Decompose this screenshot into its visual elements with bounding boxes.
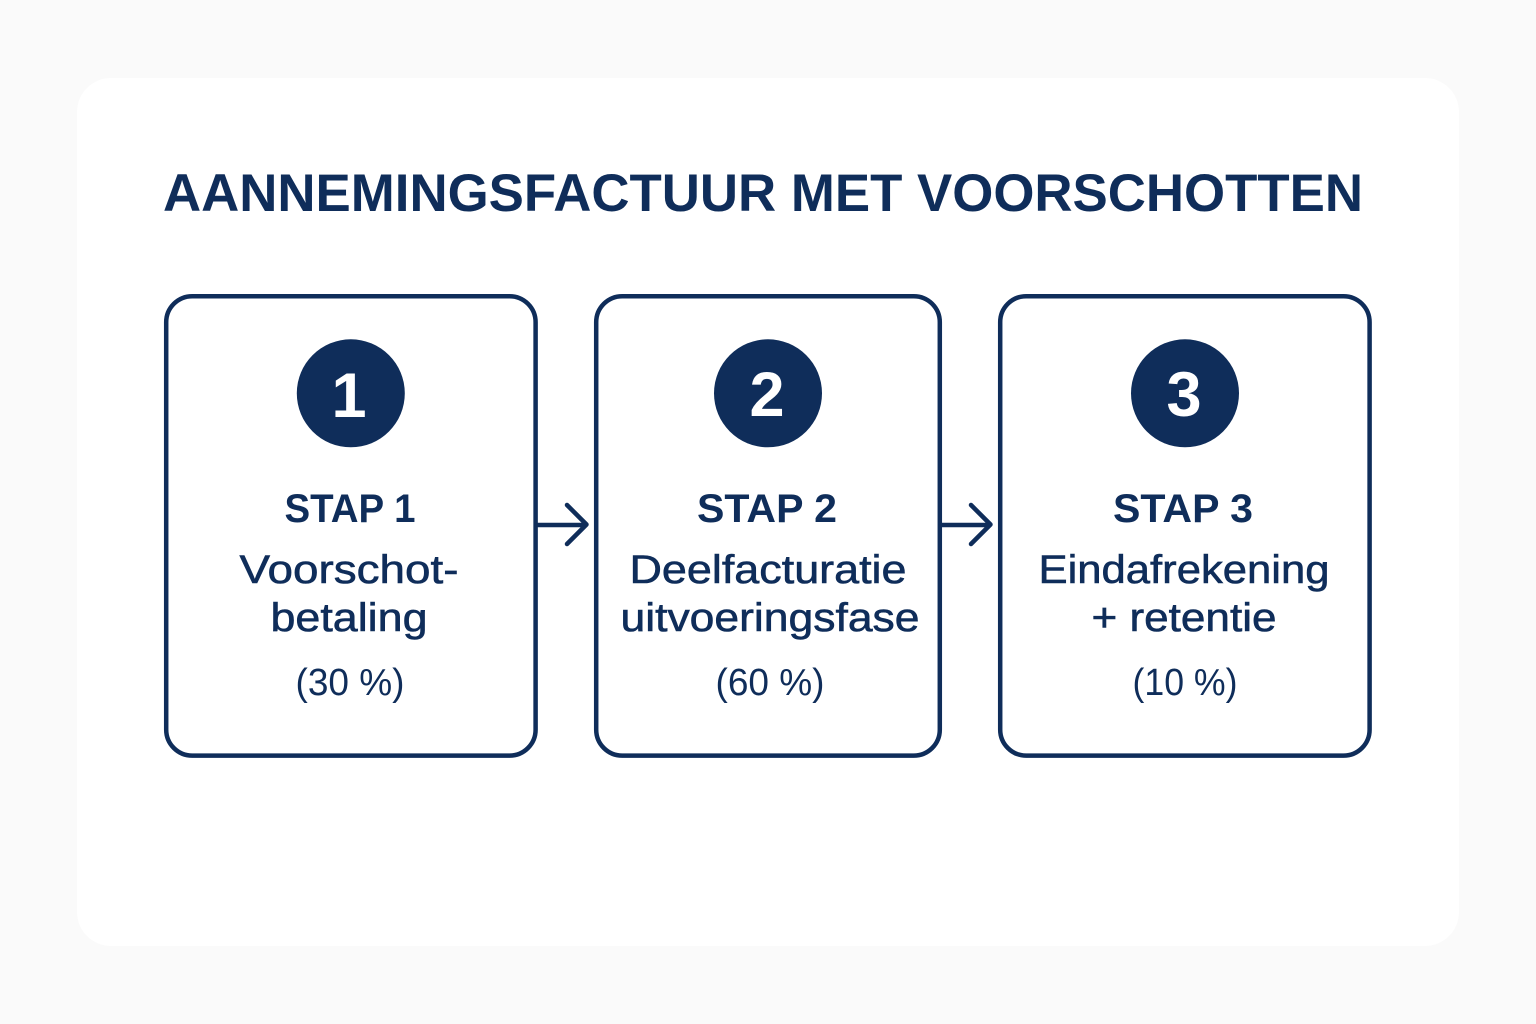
arrow: step 1 to step 2 <box>538 505 586 544</box>
icon: number 1 badge: 1 <box>331 361 367 431</box>
step 2 description: uitvoeringsfase <box>620 596 920 640</box>
icon: number 2 badge: 2 <box>749 360 785 430</box>
icon: number 3 badge <box>1131 339 1239 447</box>
step 3 description <box>1038 548 1330 640</box>
step 1 description: betaling <box>270 596 428 640</box>
step 3 description: + retentie <box>1092 596 1276 640</box>
step 3 percentage: (10 %) <box>1132 662 1238 704</box>
panel: step 1 <box>166 296 536 756</box>
step 3 heading: STAP 3 <box>1113 487 1253 531</box>
step 2 percentage: (60 %) <box>716 662 824 704</box>
panel: main card <box>77 78 1459 946</box>
arrow: step 2 to step 3 <box>942 505 990 544</box>
step 2 description: Deelfacturatie <box>630 548 906 592</box>
step 1 heading: STAP 1 <box>284 487 416 531</box>
step 2 description <box>620 548 920 640</box>
icon: number 2 badge <box>714 339 822 447</box>
step 1 description <box>240 548 458 640</box>
icon: number 3 badge: 3 <box>1166 360 1202 430</box>
panel: step 2 <box>596 296 940 756</box>
title: AANNEMINGSFACTUUR MET VOORSCHOTTEN <box>163 164 1363 223</box>
step 3 description: Eindafrekening <box>1038 548 1330 592</box>
icon: number 1 badge <box>297 339 405 447</box>
panel: step 3 <box>1000 296 1370 756</box>
step 1 percentage: (30 %) <box>296 662 404 704</box>
step 1 description: Voorschot- <box>240 548 458 592</box>
step 2 heading: STAP 2 <box>697 487 837 531</box>
